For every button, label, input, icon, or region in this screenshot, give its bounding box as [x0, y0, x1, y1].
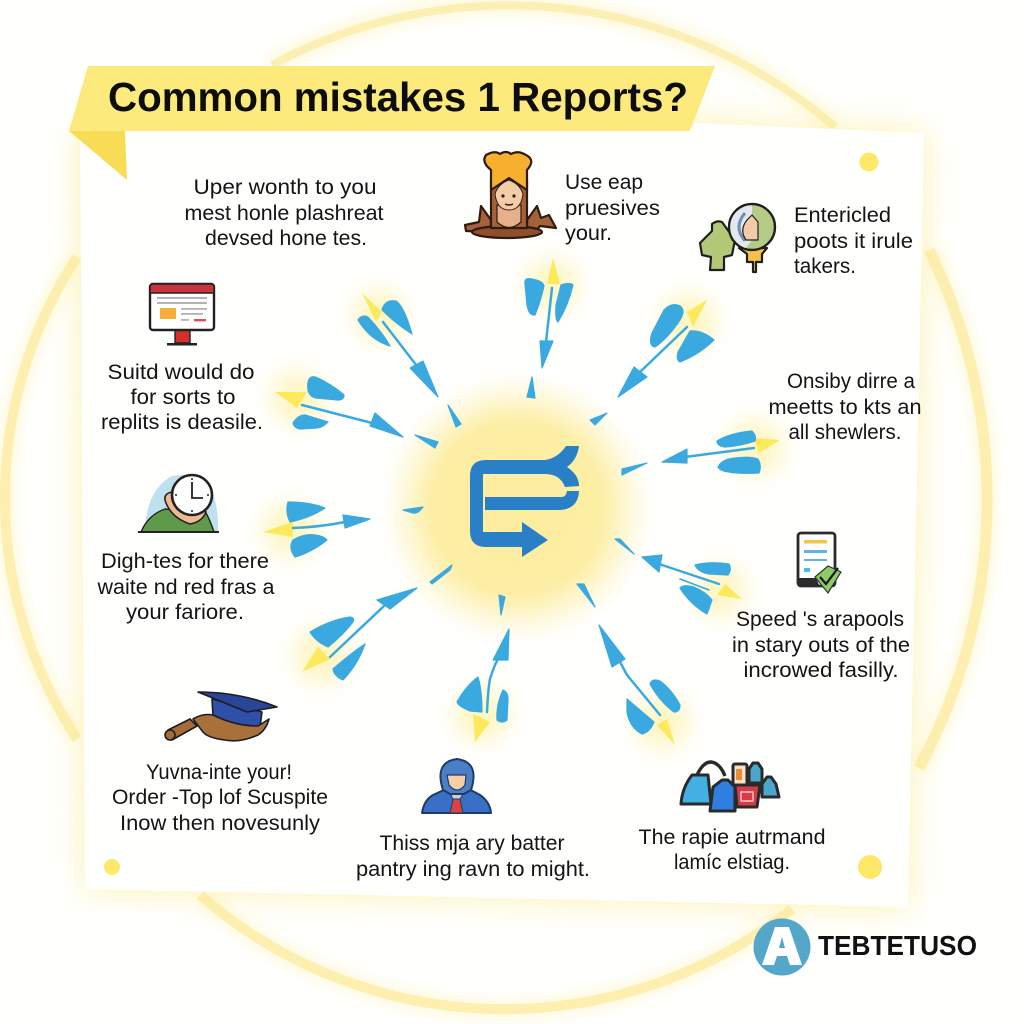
text: left upper: Suitd would do: [108, 361, 254, 384]
arrow: bottom right: [577, 584, 689, 749]
text: top right: takers.: [794, 255, 856, 278]
arrow: bottom: [455, 595, 509, 742]
text: top left: [184, 176, 384, 250]
text: bottom right: The rapie autrmand: [638, 826, 826, 849]
text: bottom left: Inow then novesunly: [120, 812, 321, 835]
text: top center: pruesives: [565, 197, 660, 220]
text: top center: [565, 171, 660, 245]
arrow: upper left side: [271, 371, 438, 448]
text: bottom center: [356, 832, 590, 881]
text: top left: mest honle plashreat: [184, 202, 384, 225]
icon: woman with tall hat: [465, 152, 556, 238]
text: bottom center: Thiss mja ary batter: [380, 832, 565, 855]
icon: person with clock: [138, 475, 219, 533]
text: right lower: Speed 's arapools: [736, 608, 904, 631]
icon: hooded person: [422, 759, 491, 813]
arrow: top: [525, 258, 578, 398]
text: top left: devsed hone tes.: [205, 227, 367, 250]
text: bottom left: Order -Top lof Scuspite: [112, 786, 328, 809]
text: top right: poots it irule: [794, 230, 913, 253]
text: left middle: Digh-tes for there: [101, 550, 269, 573]
text: top left: Uper wonth to you: [194, 176, 376, 199]
text: top right: [794, 204, 913, 278]
text: right lower: [732, 608, 910, 682]
brand logo: [754, 918, 977, 976]
text: left upper: replits is deasile.: [101, 411, 263, 434]
text: top center: your.: [565, 222, 612, 245]
text: bottom right: lamíc elstiag.: [674, 851, 790, 874]
center sun glow: [379, 370, 655, 646]
arrow: right: [622, 420, 783, 476]
icon: monitor: [150, 284, 214, 346]
icon: document with check: [798, 533, 841, 593]
text: bottom left: [112, 761, 328, 835]
icon: graduation cap and scroll: [165, 692, 277, 741]
arrow: upper left: [354, 290, 461, 427]
text: right upper: Onsiby dirre a: [787, 370, 915, 393]
text: left upper: [101, 361, 263, 434]
text: left middle: your fariore.: [126, 601, 244, 624]
text: bottom center: pantry ing ravn to might.: [356, 858, 590, 881]
brand name: TEBTETUSO: [818, 930, 977, 961]
text: right lower: in stary outs of the: [732, 634, 910, 657]
text: bottom left: Yuvna-inte your!: [146, 761, 292, 784]
text: top right: Entericled: [794, 204, 891, 227]
decorative dots: [104, 152, 882, 879]
text: right lower: incrowed fasilly.: [744, 659, 898, 682]
arrow: lower right: [615, 539, 746, 616]
arrow: lower left: [294, 565, 452, 684]
arrow: upper right: [590, 294, 716, 425]
text: top center: Use eap: [565, 171, 643, 194]
text: right upper: all shewlers.: [788, 421, 902, 444]
text: left middle: [96, 550, 275, 624]
arrow: left: [263, 502, 423, 557]
center logo icon: [470, 446, 579, 557]
text: right upper: meetts to kts an: [768, 396, 922, 419]
text: left upper: for sorts to: [130, 386, 236, 409]
icon: tree and magnifier: [700, 204, 775, 272]
text: right upper: [768, 370, 922, 444]
heading: Common mistakes 1 Reports?: [108, 74, 688, 120]
title banner: [69, 66, 715, 180]
text: bottom right: [638, 826, 826, 874]
text: left middle: waite nd red fras a: [96, 576, 275, 599]
panel: main sheet: [80, 123, 924, 907]
icon: bags and bottles: [681, 762, 779, 811]
